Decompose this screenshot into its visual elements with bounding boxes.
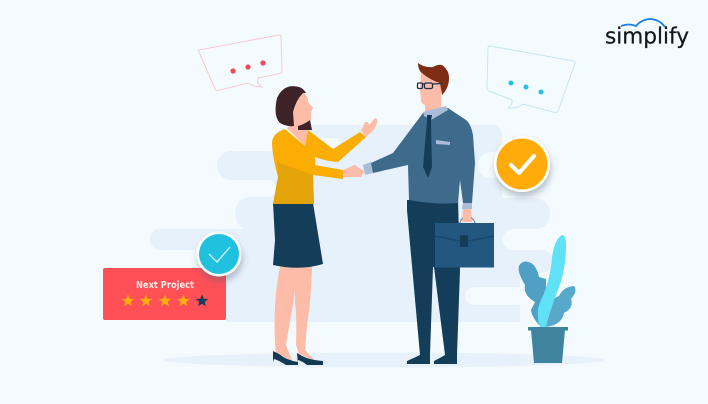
man: neck and face [420, 71, 441, 118]
woman [272, 86, 377, 365]
speech bubble: red [198, 35, 282, 91]
woman: lower hair at chin [298, 120, 312, 130]
plant: pot [528, 327, 568, 363]
man: hair [418, 63, 449, 95]
card stars [122, 294, 208, 306]
man [344, 63, 475, 364]
logo: simplify: simplify [605, 24, 689, 50]
briefcase [435, 209, 494, 268]
man: cuffs [363, 162, 472, 209]
cloud highlights [250, 138, 545, 305]
speech bubble: blue [487, 46, 575, 113]
woman: legs [275, 266, 296, 361]
woman: raised hand [361, 118, 377, 137]
man: shirt [371, 108, 475, 204]
teal check badge [196, 232, 242, 276]
project rating card [103, 268, 226, 320]
man: tie [423, 115, 432, 178]
plant: right leaf [544, 286, 575, 327]
woman: skirt [273, 203, 323, 268]
man: hand holding case [462, 208, 472, 222]
man: collar [423, 106, 448, 120]
man: handshake hand [344, 165, 364, 177]
man: trousers [407, 200, 460, 364]
ground shadow [163, 352, 605, 368]
plant: tall leaf [538, 235, 566, 327]
woman: neck and face [287, 93, 313, 146]
woman: shoes [273, 351, 298, 365]
woman: hair [276, 86, 306, 126]
man: glasses [418, 83, 442, 88]
plant: left leaf [519, 262, 546, 327]
orange check badge [494, 136, 550, 192]
woman: hand in handshake [343, 165, 364, 177]
background cloud [150, 125, 553, 322]
woman: sweater [272, 129, 366, 204]
man: shirt pocket [436, 140, 450, 145]
plant [519, 235, 575, 363]
card title: Next Project [136, 280, 194, 291]
